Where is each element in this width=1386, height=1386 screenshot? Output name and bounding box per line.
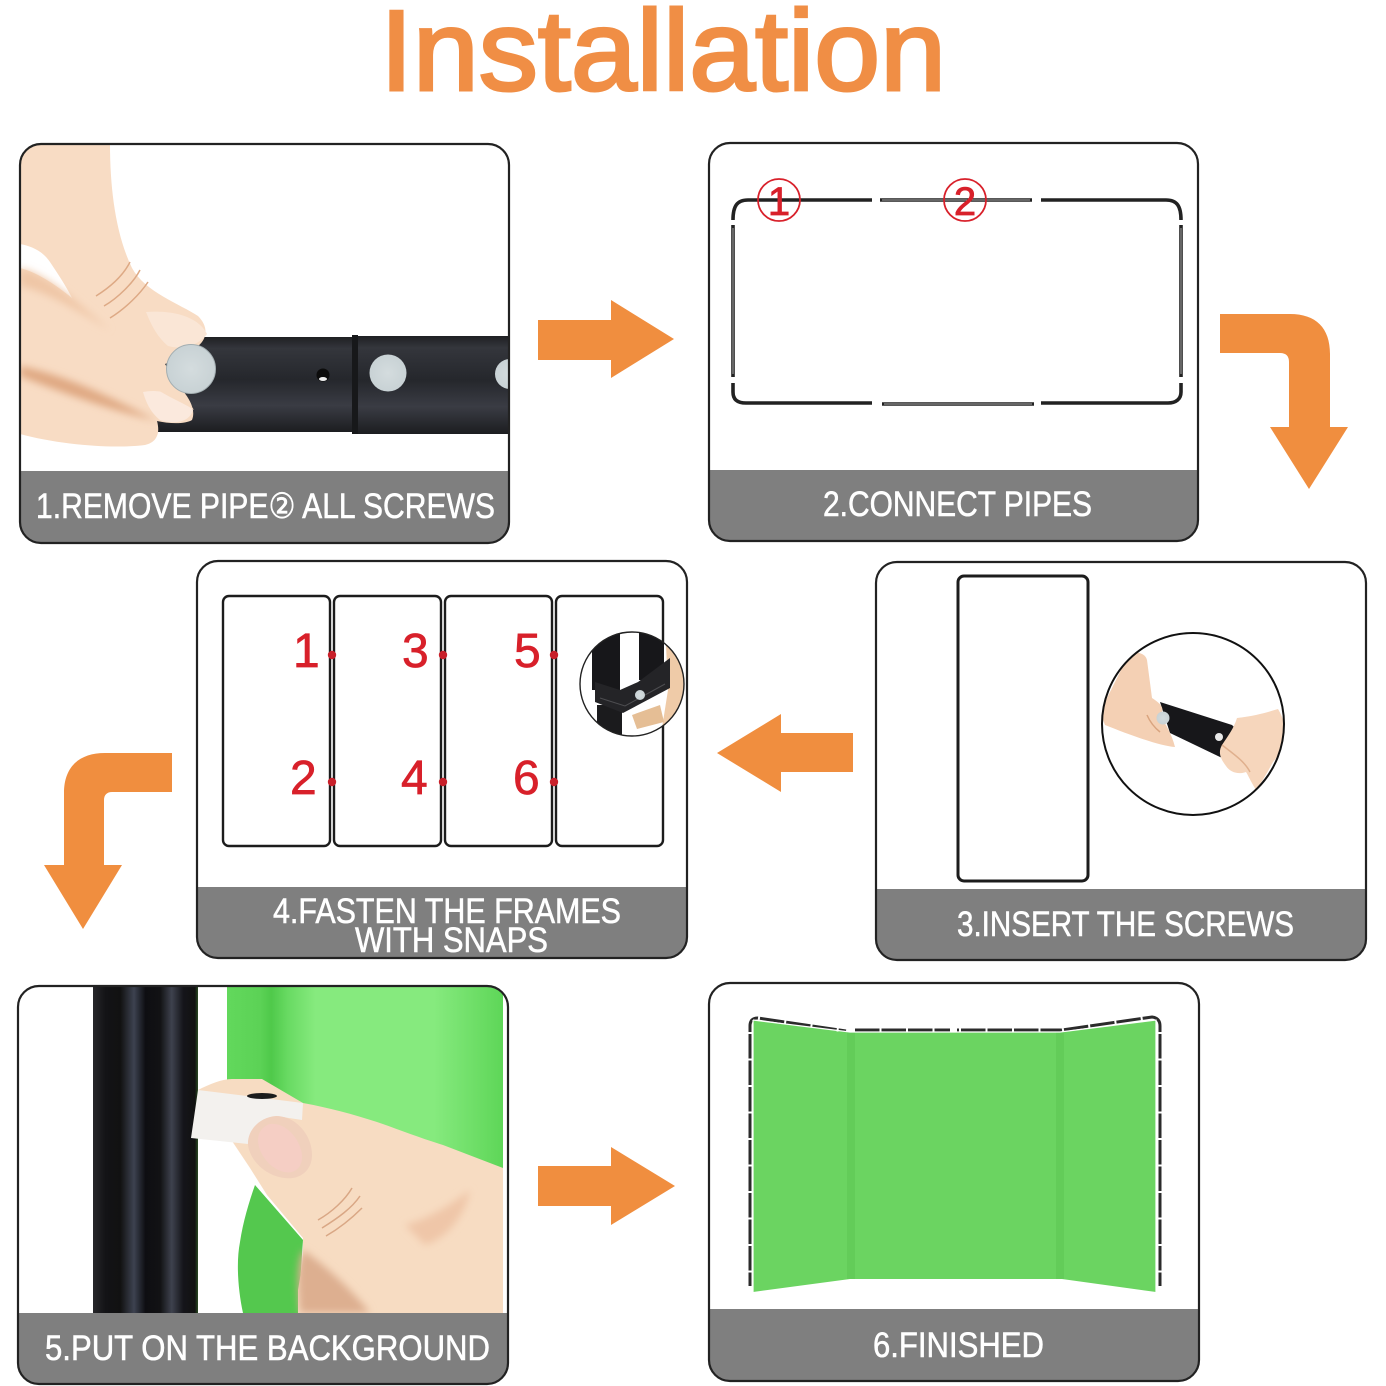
caption: 4.FASTEN THE FRAMES xyxy=(273,892,621,931)
arrow: step 3 to 4 xyxy=(717,714,853,792)
arrow: step 4 to 5 xyxy=(44,753,172,929)
caption: 3.INSERT THE SCREWS xyxy=(957,905,1294,944)
snap numbers: 1 xyxy=(293,625,320,678)
snap numbers xyxy=(292,633,539,795)
caption: 6.FINISHED xyxy=(873,1326,1044,1365)
snap numbers: 6 xyxy=(513,752,540,805)
marker 1: 1 xyxy=(768,180,790,224)
four frames xyxy=(223,596,663,846)
caption: WITH SNAPS xyxy=(355,921,548,960)
panel: step 4 fasten frames xyxy=(198,594,686,957)
panel: step 5 put on background xyxy=(18,986,508,1384)
marker 1 xyxy=(758,179,800,224)
snap numbers: 2 xyxy=(290,752,317,805)
inset: snap clamp xyxy=(580,630,690,740)
icon: hand holding screw xyxy=(20,144,216,447)
panel: step 1 remove screws xyxy=(20,144,525,543)
panel: step 6 finished xyxy=(709,983,1199,1381)
pipe with screws xyxy=(150,335,525,434)
caption: 1.REMOVE PIPE② ALL SCREWS xyxy=(36,487,495,526)
pipe frame pieces xyxy=(733,200,1181,404)
panel: step 3 insert screws xyxy=(876,562,1366,960)
black pole xyxy=(93,986,198,1313)
snap dots xyxy=(328,651,558,786)
icon: hand with fabric tab xyxy=(191,1079,503,1313)
snap numbers: 4 xyxy=(401,752,428,805)
green cloth xyxy=(227,986,503,1313)
caption xyxy=(273,898,620,952)
marker 2 xyxy=(944,179,986,224)
marker 2: 2 xyxy=(954,180,976,224)
snap numbers: 5 xyxy=(514,625,541,678)
arrow: step 2 to 3 xyxy=(1220,314,1348,489)
arrow: step 5 to 6 xyxy=(538,1147,675,1225)
caption: 2.CONNECT PIPES xyxy=(823,485,1092,524)
panel: step 2 connect pipes xyxy=(709,143,1198,541)
caption: 5.PUT ON THE BACKGROUND xyxy=(45,1329,490,1368)
finished green screen xyxy=(750,1017,1160,1292)
arrow: step 1 to 2 xyxy=(538,300,674,378)
single frame xyxy=(958,576,1088,881)
snap numbers: 3 xyxy=(402,625,429,678)
inset: hands inserting screw xyxy=(1100,633,1285,815)
